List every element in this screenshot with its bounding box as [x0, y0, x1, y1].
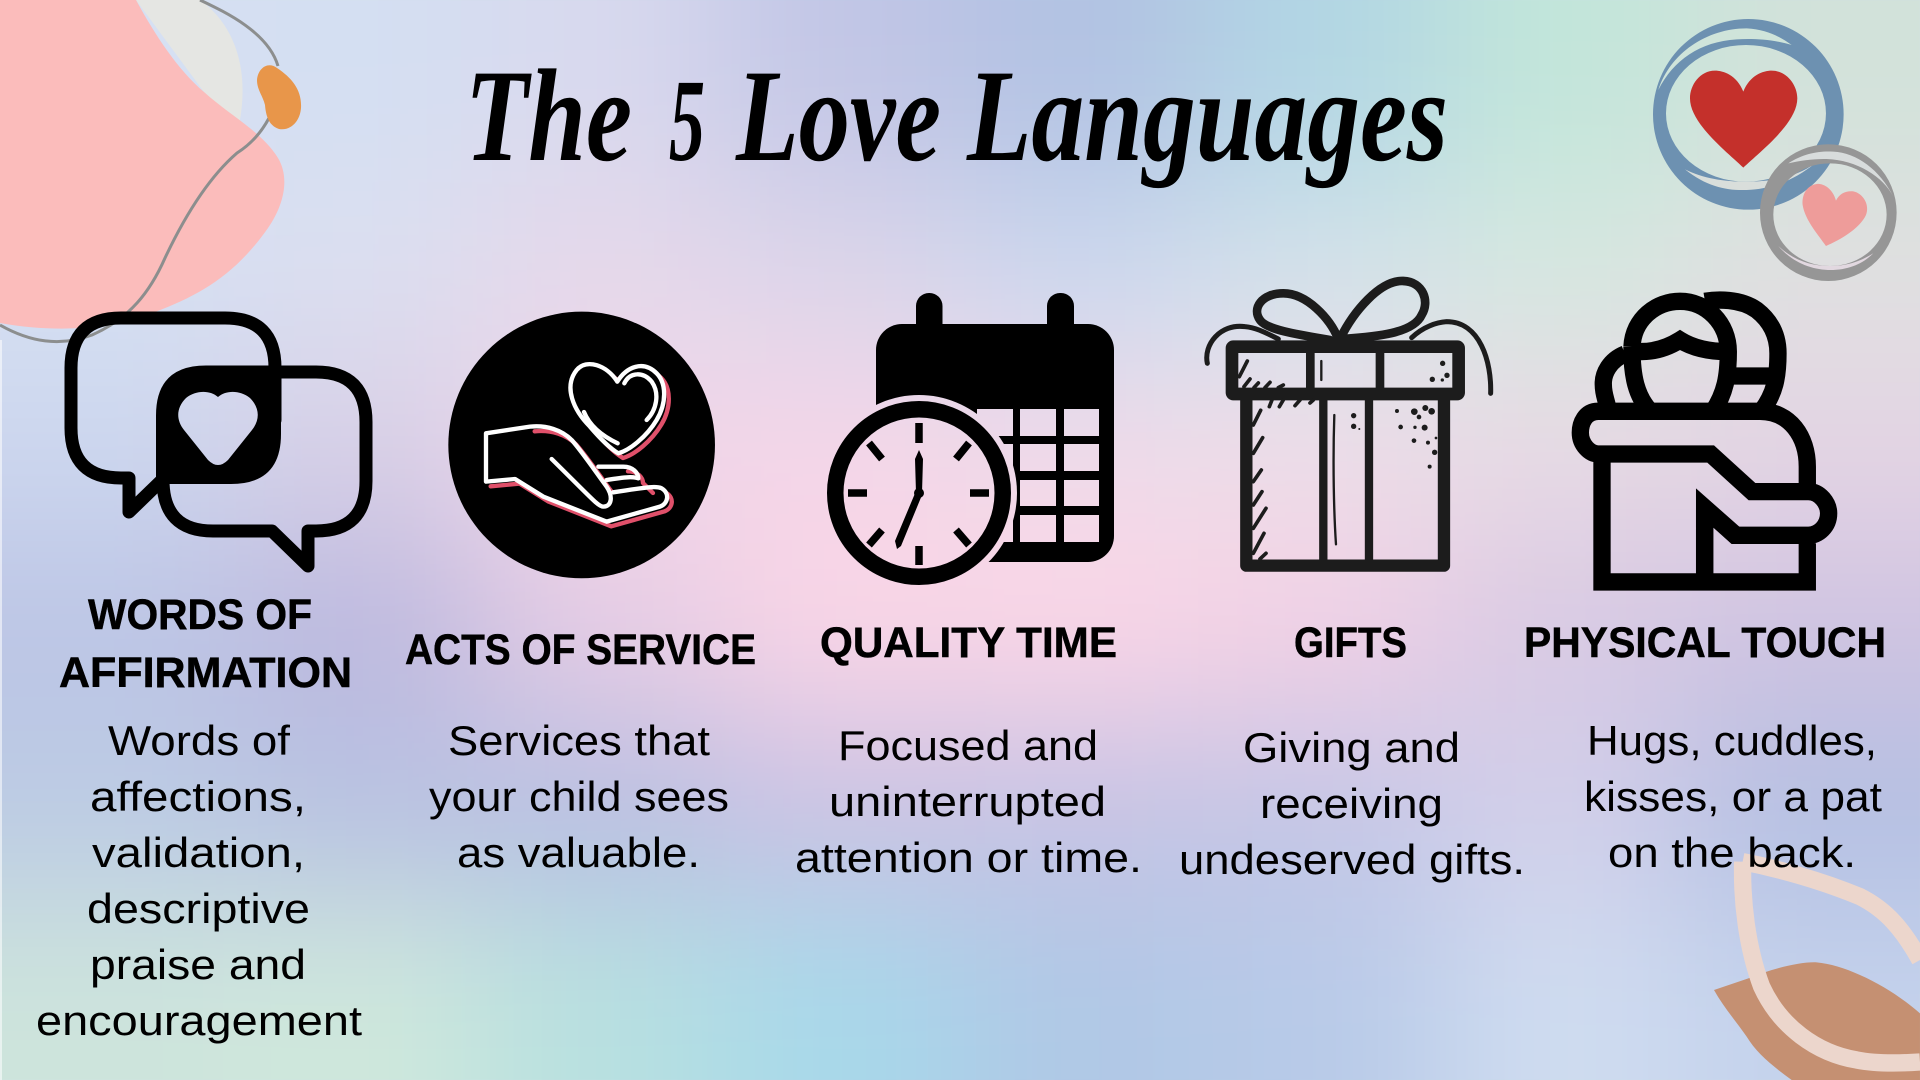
- calendar: [876, 293, 1114, 562]
- text: quality time description: [795, 722, 1142, 881]
- grey scribble circle with pink heart: [1760, 144, 1897, 281]
- icon: hand holding heart in black circle: [448, 312, 715, 578]
- title: 5: [669, 55, 705, 186]
- heading: physical touch: PHYSICAL TOUCH: [1524, 619, 1886, 667]
- text: gifts description: undeserved gifts.: [1179, 836, 1525, 883]
- text: gifts description: [1179, 724, 1525, 883]
- text: words of affirmation description: encouragement: [36, 997, 362, 1044]
- icon: gift box: [1207, 281, 1491, 566]
- text: words of affirmation description: descriptive: [87, 885, 310, 932]
- red shadow of hand and heart: [491, 369, 672, 526]
- text: quality time description: attention or time.: [795, 834, 1142, 881]
- text: physical touch description: [1584, 717, 1882, 876]
- text: words of affirmation description: validation,: [92, 829, 305, 876]
- bodies and arms: [1580, 411, 1829, 582]
- icon: speech bubbles with heart: [71, 318, 366, 566]
- text: acts of service description: your child sees: [429, 773, 729, 820]
- heading: gifts: GIFTS: [1294, 619, 1407, 667]
- text: acts of service description: as valuable.: [457, 829, 700, 876]
- text: words of affirmation description: praise and: [90, 941, 306, 988]
- white hand and heart outline: [486, 364, 667, 522]
- title: Languages: [966, 42, 1448, 189]
- speckle dots: [1351, 361, 1450, 469]
- icon: two people hugging: [1580, 300, 1829, 582]
- heading: words of affirmation: [59, 591, 352, 697]
- text: words of affirmation description: affections,: [90, 773, 306, 820]
- heading: acts of service: ACTS OF SERVICE: [405, 626, 756, 674]
- text: gifts description: receiving: [1260, 780, 1443, 827]
- text: words of affirmation description: [36, 717, 362, 1044]
- heading: words of affirmation: AFFIRMATION: [59, 649, 352, 697]
- heading: quality time: QUALITY TIME: [820, 619, 1117, 667]
- back person head: [1603, 300, 1778, 411]
- icon: calendar and clock: [835, 293, 1114, 577]
- front person head: [1632, 301, 1728, 411]
- title: Love: [735, 42, 941, 189]
- decoration: top-left abstract shapes: [0, 0, 301, 342]
- text: quality time description: Focused and: [838, 722, 1098, 769]
- text: physical touch description: kisses, or a pat: [1584, 773, 1882, 820]
- text: physical touch description: on the back.: [1608, 829, 1856, 876]
- title: [465, 42, 1448, 189]
- ribbon bow: [1207, 281, 1491, 393]
- text: acts of service description: [429, 717, 729, 876]
- text: physical touch description: Hugs, cuddles,: [1587, 717, 1877, 764]
- title: The: [465, 42, 632, 189]
- text: acts of service description: Services that: [448, 717, 710, 764]
- icon: hearts in scribbled circles: [1653, 19, 1897, 281]
- text: words of affirmation description: Words of: [108, 717, 290, 764]
- lid and box: [1232, 347, 1459, 566]
- clock: [835, 409, 1003, 577]
- hatch marks: [1239, 361, 1313, 559]
- text: gifts description: Giving and: [1243, 724, 1460, 771]
- heading: words of affirmation: WORDS OF: [88, 591, 312, 639]
- text: quality time description: uninterrupted: [829, 778, 1106, 825]
- arm notch point: [1696, 488, 1740, 580]
- decoration: bottom-right leaf: [1714, 862, 1920, 1080]
- blue scribble circle with red heart: [1653, 19, 1844, 210]
